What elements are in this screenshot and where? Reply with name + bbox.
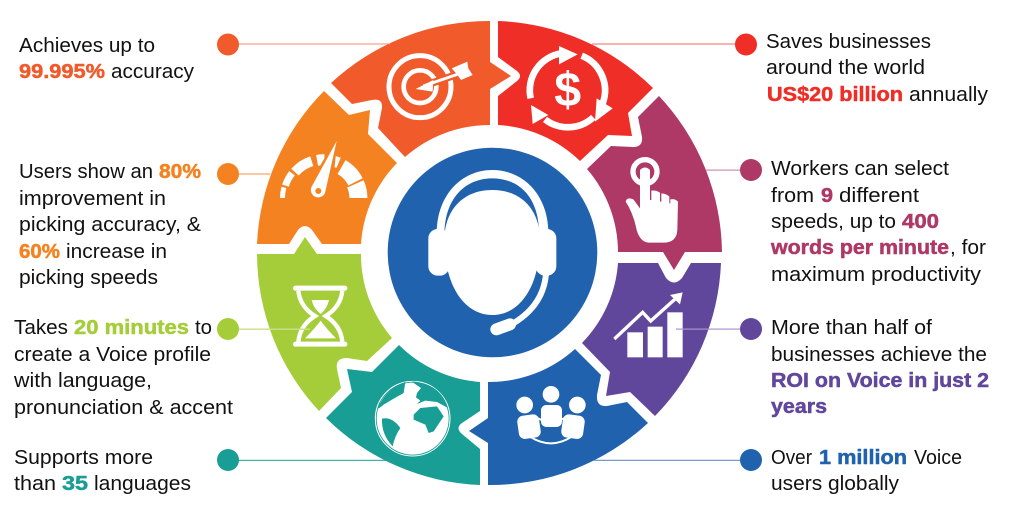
segment: languages: [326, 345, 480, 485]
text: savings: Saves businesses: [766, 31, 931, 53]
centre circle with headset: [388, 148, 597, 357]
text: ROI: years: [771, 396, 827, 418]
text: profile time: Takes: [14, 317, 68, 339]
text: ROI: More than half of: [771, 317, 932, 339]
text: picking: picking accuracy, &: [19, 214, 202, 236]
text: users: users globally: [771, 473, 899, 495]
segment: picking: [257, 91, 397, 244]
text: accuracy: accuracy: [111, 61, 194, 83]
text: users: Voice: [914, 447, 962, 469]
connector: picking: [217, 163, 270, 185]
text: accuracy: 99.995%: [19, 61, 105, 83]
text: picking: Users show an: [19, 161, 153, 183]
text: languages: [14, 447, 191, 495]
icon: growth chart: [614, 292, 683, 357]
text: users: 1 million: [819, 447, 907, 469]
icon: dollar with arrows: $: [554, 63, 581, 117]
connector: users: [593, 449, 762, 471]
text: speeds: Workers can select: [771, 158, 949, 180]
icon: target: [389, 56, 473, 118]
text: languages: Supports more: [14, 447, 153, 469]
icon: tapping hand: [626, 160, 678, 243]
connector: languages: [217, 449, 393, 471]
text: profile time: pronunciation & accent: [14, 397, 233, 419]
text: profile time: [13, 317, 233, 419]
connector: savings: [592, 34, 757, 56]
icon: people group: [516, 386, 586, 443]
text: savings: annually: [909, 84, 988, 106]
text: profile time: with language,: [13, 370, 152, 392]
text: profile time: 20 minutes: [74, 317, 189, 339]
text: languages: than: [14, 473, 56, 495]
text: savings: around the world: [766, 57, 925, 79]
text: picking: increase in: [66, 241, 167, 263]
text: users: [771, 447, 962, 495]
connector: speeds: [706, 159, 762, 181]
icon: hourglass: [293, 286, 347, 347]
text: speeds: , for: [950, 237, 986, 259]
text: ROI: [771, 317, 989, 418]
text: savings: [766, 31, 988, 106]
text: speeds: words per minute: [770, 237, 949, 259]
icon: dollar with arrows: [530, 46, 613, 127]
text: accuracy: [19, 35, 194, 83]
text: picking: [19, 161, 202, 289]
text: picking: 60%: [19, 241, 60, 263]
segment: profile time: [257, 237, 392, 411]
segment: users: [469, 349, 648, 485]
text: accuracy: Achieves up to: [19, 35, 155, 57]
segment: speeds: [587, 96, 722, 270]
text: ROI: businesses achieve the: [771, 344, 987, 366]
text: speeds: from: [771, 185, 814, 207]
segment: ROI: [582, 263, 721, 416]
text: savings: US$20 billion: [767, 84, 903, 106]
text: ROI: ROI on Voice in just 2: [771, 370, 989, 392]
text: speeds: 400: [902, 211, 939, 233]
text: picking: picking speeds: [19, 267, 158, 289]
text: profile time: to: [195, 317, 212, 339]
text: languages: 35: [62, 473, 88, 495]
icon: speedometer: [282, 135, 365, 239]
connector: ROI: [676, 318, 762, 340]
text: picking: 80%: [159, 161, 201, 183]
text: speeds: 9: [821, 185, 833, 207]
text: profile time: create a Voice profile: [14, 344, 211, 366]
connector: accuracy: [217, 34, 390, 56]
text: languages: languages: [94, 473, 191, 495]
segment: savings: [498, 21, 653, 161]
text: speeds: different: [839, 185, 919, 207]
text: speeds: speeds, up to: [771, 211, 896, 233]
text: speeds: maximum productivity: [771, 264, 981, 286]
segment: accuracy: [331, 21, 511, 157]
icon: globe: [375, 381, 450, 456]
connector: profile time: [217, 318, 310, 340]
text: speeds: [770, 158, 986, 286]
text: users: Over: [771, 447, 812, 469]
text: picking: improvement in: [19, 188, 166, 210]
